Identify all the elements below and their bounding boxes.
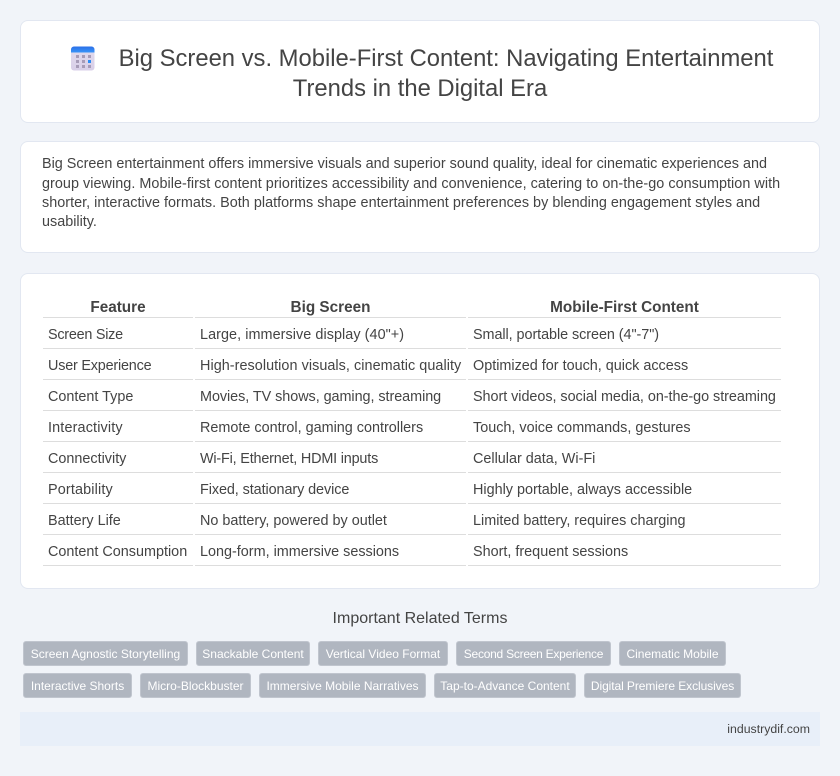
heading: important related terms: Important Related Terms — [333, 610, 507, 627]
text block: introduction: group viewing. Mobile-first content prioritizes accessibility and convenience, catering to on-the-go consumption with — [42, 176, 780, 192]
table rows: Optimized for touch, quick access — [473, 358, 688, 374]
table rows: Highly portable, always accessible — [473, 482, 692, 498]
table rows: Interactivity — [48, 420, 123, 436]
table rows: High-resolution visuals, cinematic quality — [200, 358, 461, 374]
table rows: Limited battery, requires charging — [473, 513, 686, 529]
table rows: No battery, powered by outlet — [200, 513, 387, 529]
tag list: Vertical Video Format — [326, 647, 440, 661]
table rows: Screen Size — [48, 327, 123, 343]
table rows: Fixed, stationary device — [200, 482, 349, 498]
table rows: Portability — [48, 482, 113, 498]
tag list: Tap-to-Advance Content — [440, 679, 570, 693]
title: Big Screen vs. Mobile-First Content: Navigating Entertainment — [119, 45, 773, 72]
tag list: Second Screen Experience — [464, 647, 603, 661]
tag list: Snackable Content — [202, 647, 304, 661]
table rows: Content Type — [48, 389, 133, 405]
table rows: User Experience — [48, 358, 151, 374]
table header: Big Screen — [291, 299, 370, 316]
tag list — [23, 641, 741, 698]
tag list: Screen Agnostic Storytelling — [31, 647, 180, 661]
table rows: Large, immersive display (40"+) — [200, 327, 404, 343]
tag list: Micro-Blockbuster — [147, 679, 244, 693]
text block: introduction: shorter, interactive formats. Both platforms shape entertainment preferences by blending engagement styles and — [42, 195, 760, 211]
comparison table — [43, 299, 781, 566]
text block: introduction — [42, 156, 780, 230]
panel: title header — [20, 20, 820, 123]
text block: introduction: Big Screen entertainment offers immersive visuals and superior sound quality, ideal for cinematic experiences and — [42, 156, 767, 172]
table rows: Wi-Fi, Ethernet, HDMI inputs — [200, 451, 378, 467]
table rows: Touch, voice commands, gestures — [473, 420, 691, 436]
icon: calendar grid — [71, 46, 94, 70]
table header: Mobile-First Content — [550, 299, 699, 316]
table rows: Movies, TV shows, gaming, streaming — [200, 389, 441, 405]
table header — [43, 299, 781, 318]
table rows: Small, portable screen (4"-7") — [473, 327, 659, 343]
table header: Feature — [90, 299, 146, 316]
table rows: Short videos, social media, on-the-go streaming — [473, 389, 776, 405]
table rows: Remote control, gaming controllers — [200, 420, 423, 436]
table rows — [43, 327, 781, 566]
panel: introduction — [20, 141, 820, 253]
table rows: Connectivity — [48, 451, 126, 467]
title — [119, 45, 774, 102]
tag list: Interactive Shorts — [31, 679, 124, 693]
tag list: Digital Premiere Exclusives — [591, 679, 734, 693]
table rows: Long-form, immersive sessions — [200, 544, 399, 560]
tag list: Immersive Mobile Narratives — [266, 679, 419, 693]
panel: comparison table — [20, 273, 820, 589]
footer bar — [20, 712, 820, 746]
table rows: Content Consumption — [48, 544, 187, 560]
text block: introduction: usability. — [42, 214, 97, 230]
footer text: industrydif.com — [727, 722, 810, 736]
table rows: Short, frequent sessions — [473, 544, 628, 560]
tag list: Cinematic Mobile — [626, 647, 719, 661]
title: Trends in the Digital Era — [293, 75, 547, 102]
table rows: Battery Life — [48, 513, 121, 529]
table rows: Cellular data, Wi-Fi — [473, 451, 595, 467]
